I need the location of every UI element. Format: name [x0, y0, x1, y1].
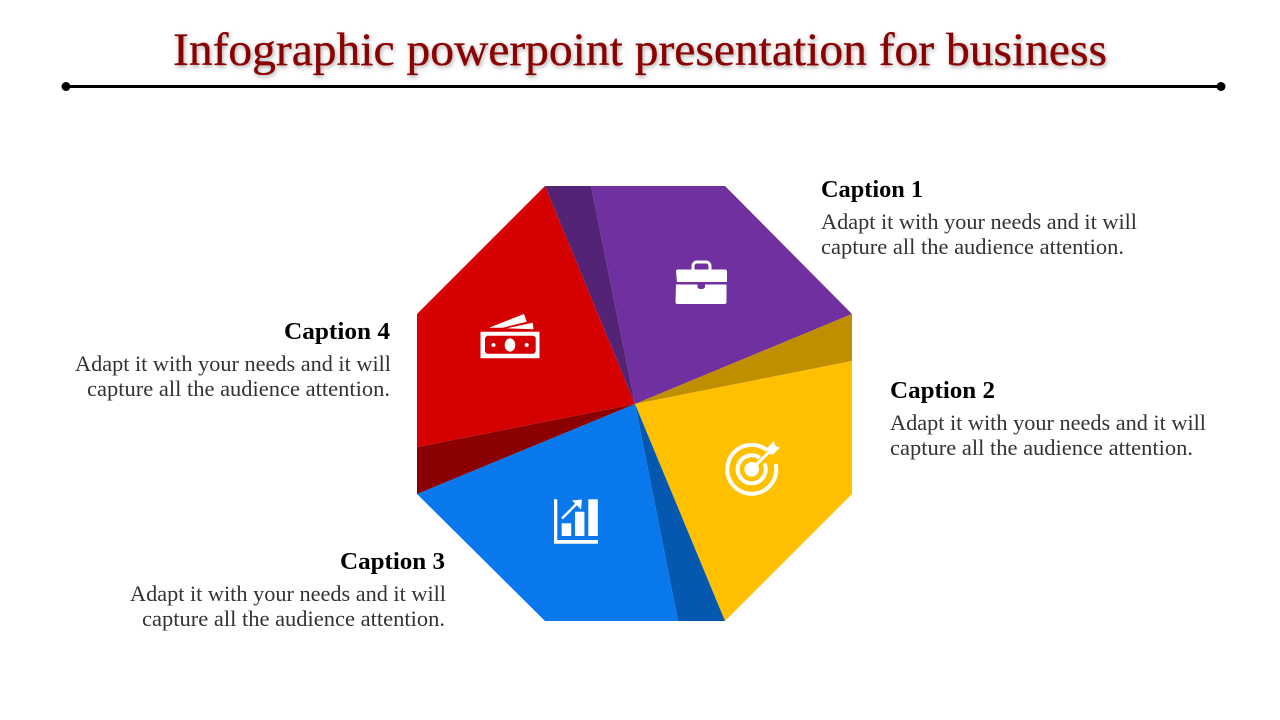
caption 4: Caption 4 [284, 319, 390, 345]
segment: red [417, 186, 635, 494]
caption 3: Caption 3 [340, 549, 445, 575]
caption 3: Adapt it with your needs and it will [130, 581, 446, 606]
title: Infographic powerpoint presentation for business [173, 24, 1107, 76]
octagon diagram [417, 186, 852, 621]
segment: blue [417, 404, 725, 621]
icon: target with arrow [727, 441, 780, 494]
caption 2 [890, 378, 1206, 460]
caption 4: capture all the audience attention. [87, 376, 390, 401]
caption 4: Adapt it with your needs and it will [75, 351, 391, 376]
caption 2: Adapt it with your needs and it will [890, 410, 1206, 435]
icon: rising bar chart [554, 499, 598, 544]
caption 2: Caption 2 [890, 378, 995, 404]
caption 1: capture all the audience attention. [821, 234, 1124, 259]
caption 3 [130, 549, 446, 631]
title rule with end dots [62, 82, 1226, 91]
segment: yellow [635, 314, 852, 621]
caption 2: capture all the audience attention. [890, 435, 1193, 460]
caption 4 [75, 319, 391, 401]
icon: banknotes [480, 314, 540, 358]
caption 1: Adapt it with your needs and it will [821, 209, 1137, 234]
caption 3: capture all the audience attention. [142, 606, 445, 631]
segment: purple [545, 186, 852, 404]
icon: briefcase [676, 262, 727, 304]
caption 1: Caption 1 [821, 177, 923, 203]
caption 1 [821, 177, 1137, 259]
